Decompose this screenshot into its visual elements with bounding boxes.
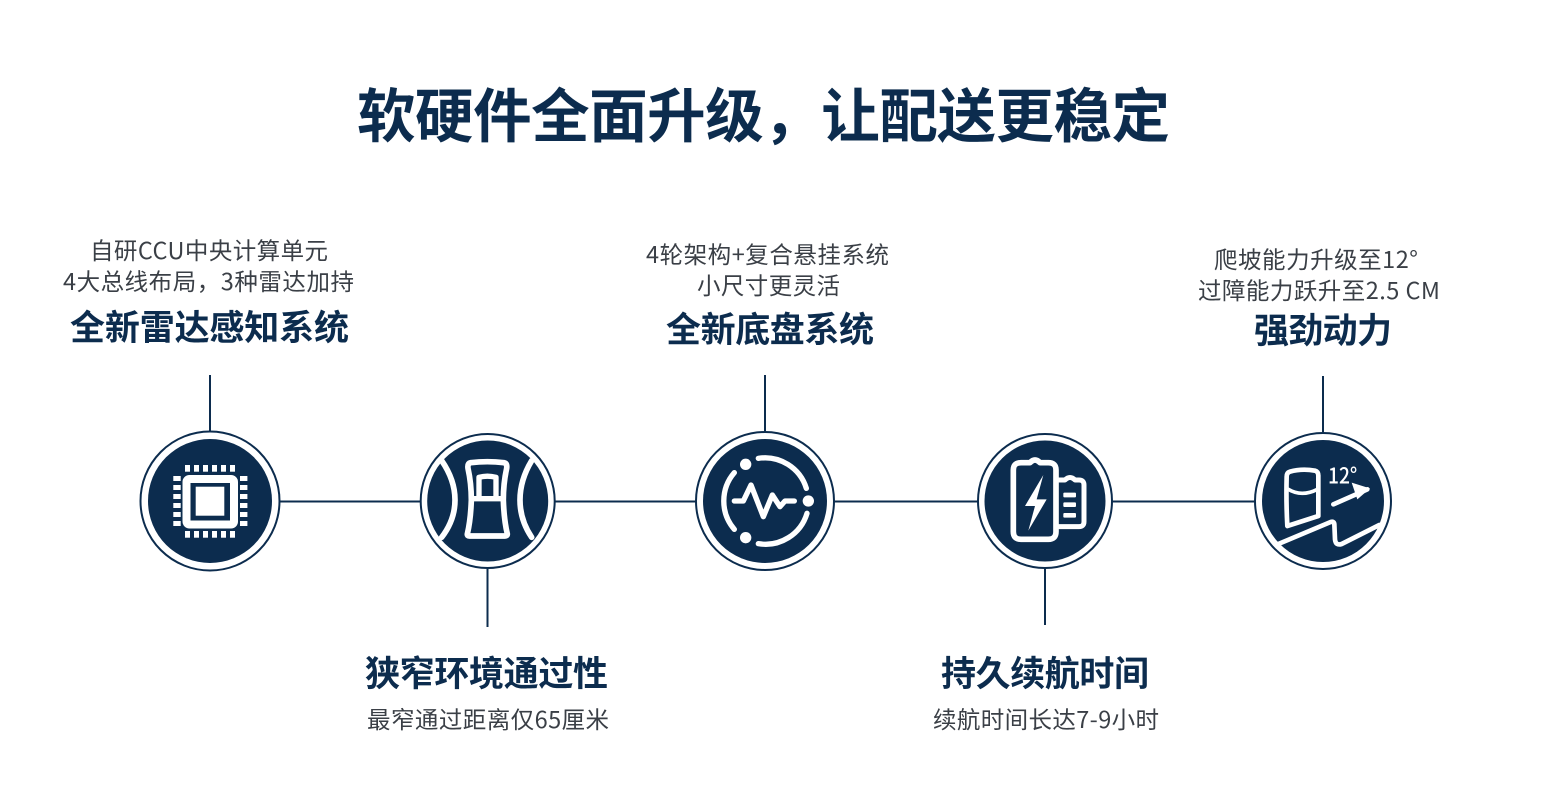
icon: pulse ring	[696, 432, 834, 570]
heading: radar: 全新雷达感知系统	[70, 300, 349, 351]
heading: chassis: 全新底盘系统	[666, 302, 874, 353]
text block: power description: 过障能力跃升至2.5 CM	[1198, 272, 1440, 306]
icon: robot between walls	[421, 434, 555, 568]
text block: chassis description: 4轮架构+复合悬挂系统	[646, 236, 889, 270]
heading: battery life: 持久续航时间	[941, 646, 1149, 697]
text block: radar description: 自研CCU中央计算单元	[90, 232, 328, 266]
icon: batteries	[978, 434, 1112, 568]
panel: strong power	[1198, 241, 1440, 569]
panel: battery life	[933, 434, 1159, 735]
text block: chassis description: 小尺寸更灵活	[697, 267, 840, 301]
panel: chassis system	[646, 236, 889, 570]
icon: climbing robot	[1255, 433, 1391, 569]
heading: power: 强劲动力	[1254, 303, 1392, 354]
heading: narrow passage: 狭窄环境通过性	[365, 646, 608, 697]
text block: chassis description	[646, 236, 889, 301]
panel: narrow passage	[365, 434, 609, 735]
text block: narrow passage description: 最窄通过距离仅65厘米	[367, 701, 609, 735]
text block: battery description: 续航时间长达7-9小时	[933, 701, 1159, 735]
text block: radar description	[63, 232, 354, 297]
text block: power description: 爬坡能力升级至12°	[1214, 241, 1418, 275]
text block: power description	[1198, 241, 1440, 306]
title: 软硬件全面升级，让配送更稳定	[357, 69, 1170, 154]
icon: chip	[140, 432, 280, 570]
panel: radar perception system	[63, 232, 354, 570]
text block: radar description: 4大总线布局，3种雷达加持	[63, 263, 354, 297]
icon: climbing robot: 12°	[1328, 458, 1357, 490]
